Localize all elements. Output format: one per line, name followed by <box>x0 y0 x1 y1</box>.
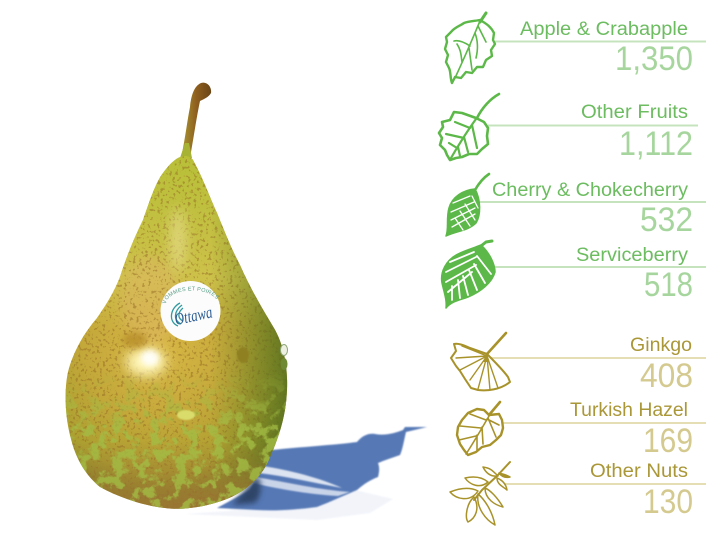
value: 518 <box>644 266 693 304</box>
row: Other Nuts <box>450 461 706 525</box>
icon: ginkgo leaf <box>451 333 510 390</box>
icon: apple leaf <box>445 13 495 83</box>
row: Apple & Crabapple <box>445 13 706 83</box>
icon: nut compound leaf <box>450 462 510 525</box>
value: 408 <box>640 357 693 395</box>
label: Cherry & Chokecherry <box>492 180 689 201</box>
pear body <box>66 156 288 509</box>
sticker Ottawa wordmark: Ottawa <box>173 302 214 329</box>
pear stem <box>180 83 211 158</box>
value: 1,350 <box>615 40 693 78</box>
value: 1,112 <box>619 125 693 163</box>
label: Turkish Hazel <box>570 400 688 421</box>
icon: hazel leaf <box>457 402 503 455</box>
row: Cherry & Chokecherry <box>446 174 706 239</box>
icon: cherry leaf <box>446 174 489 236</box>
icon: serviceberry leaf <box>442 241 495 308</box>
value: 130 <box>643 483 693 521</box>
icon: fruit leaf <box>439 94 499 160</box>
water drops on pear edge <box>280 344 288 370</box>
sticker swoosh logo <box>171 303 183 326</box>
value: 169 <box>643 422 693 460</box>
row: Serviceberry <box>442 241 706 308</box>
sticker: Ottawa apples and pears <box>160 281 220 341</box>
row: Turkish Hazel <box>457 400 706 460</box>
label: Apple & Crabapple <box>520 19 688 40</box>
pear shadow on the ground <box>185 427 427 520</box>
row: Other Fruits <box>439 94 698 163</box>
sticker arc text: VOMMES ET POIRES <box>162 286 219 304</box>
pear photograph <box>66 82 288 509</box>
row: Ginkgo <box>451 333 706 395</box>
label: Other Nuts <box>590 461 688 482</box>
label: Serviceberry <box>576 245 689 266</box>
label: Ginkgo <box>630 335 692 356</box>
value: 532 <box>640 201 693 239</box>
label: Other Fruits <box>581 102 688 123</box>
